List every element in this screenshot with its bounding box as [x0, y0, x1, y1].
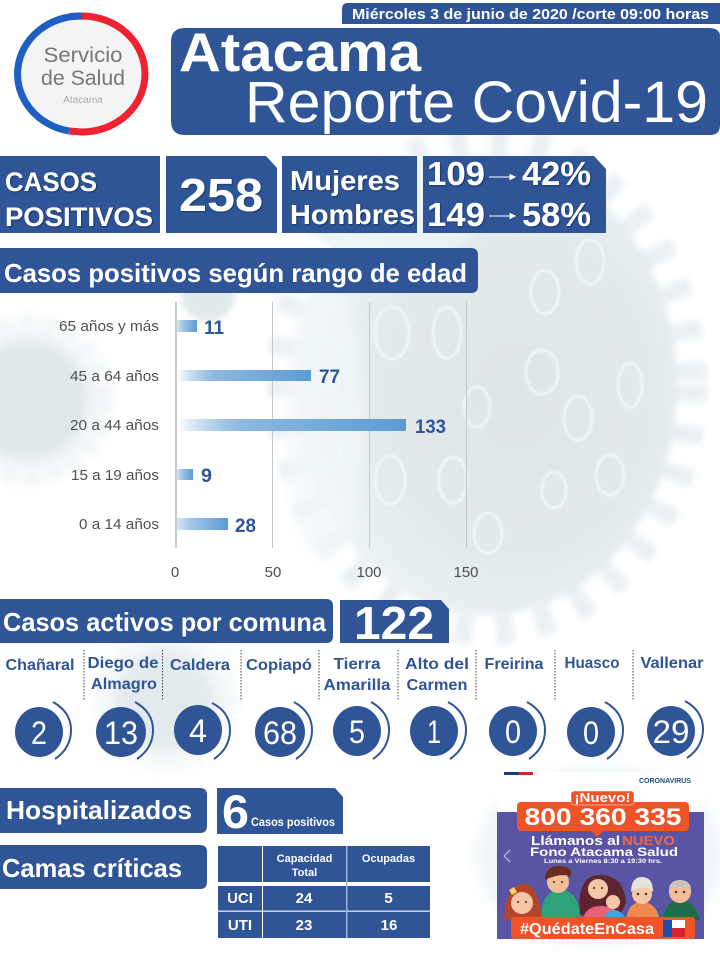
comuna names: Tierra	[334, 656, 381, 673]
comuna names: Caldera	[170, 657, 230, 674]
poster: phone line 800 360 335: CORONAVIRUS	[639, 778, 691, 785]
panel: mujeres hombres: Hombres	[290, 199, 415, 230]
bar chart: age ranges: 28	[235, 516, 256, 537]
count: Copiapó: 68	[263, 715, 297, 751]
count: Diego de Almagro	[96, 702, 153, 759]
table: critical beds: 23	[296, 917, 312, 934]
heading: casos activos por comuna: Casos activos por comuna	[3, 607, 327, 637]
bar chart: age ranges: 15 a 19 años	[71, 467, 159, 484]
poster: phone line 800 360 335: #QuédateEnCasa	[520, 921, 654, 938]
panel: gender counts and percentages	[423, 155, 606, 233]
bar chart: age ranges: 20 a 44 años	[70, 417, 159, 434]
count: Huasco: 0	[583, 715, 599, 751]
heading: camas críticas: Camas críticas	[2, 853, 182, 883]
count: Freirina	[489, 702, 545, 759]
background: small virus left	[0, 324, 104, 476]
comuna names: Alto del	[405, 656, 469, 673]
comuna names: Huasco	[564, 655, 620, 672]
poster: phone line 800 360 335: Llámanos al	[531, 833, 620, 848]
comuna names	[6, 655, 704, 694]
poster: phone line 800 360 335: 800 360 335	[524, 804, 682, 831]
panel: 6 casos positivos	[217, 785, 343, 838]
bar chart: age ranges: 0	[171, 564, 179, 581]
bar chart: age ranges: 133	[415, 417, 446, 438]
poster: phone line 800 360 335: Lunes a Viernes 8:30 a 19:30 hrs.	[544, 859, 662, 865]
comuna names: Vallenar	[640, 655, 704, 672]
count: Tierra Amarilla	[333, 702, 389, 759]
comuna names: Freirina	[484, 656, 544, 673]
count: Huasco	[567, 702, 623, 759]
logo: Servicio de Salud: de Salud	[41, 67, 125, 90]
logo: Servicio de Salud: Servicio	[44, 44, 122, 67]
count: Caldera: 4	[189, 713, 207, 749]
poster: phone line 800 360 335: ¡Nuevo!	[574, 790, 630, 805]
count: Chañaral	[15, 702, 71, 759]
heading: casos positivos según rango de edad	[0, 248, 478, 293]
panel: gender counts and percentages: 149	[427, 196, 485, 233]
title panel: Atacama	[179, 21, 421, 83]
table: critical beds: UCI	[227, 890, 253, 907]
date banner	[342, 3, 720, 24]
count: Alto del Carmen: 1	[427, 714, 441, 750]
poster: phone line 800 360 335	[497, 772, 704, 939]
panel: mujeres hombres	[282, 156, 417, 233]
panel: 6 casos positivos: Casos positivos	[251, 817, 335, 829]
table: critical beds	[218, 846, 430, 938]
count: Tierra Amarilla: 5	[349, 714, 365, 750]
comuna names: Copiapó	[246, 657, 312, 674]
title panel	[171, 21, 720, 135]
bar chart: age ranges: 9	[201, 466, 212, 487]
count: Vallenar	[647, 701, 703, 758]
bar chart: age ranges: 65 años y más	[59, 318, 159, 335]
panel: casos positivos: POSITIVOS	[5, 202, 153, 232]
bar chart: age ranges: 77	[319, 367, 340, 388]
title panel: Reporte Covid-19	[245, 70, 708, 135]
logo: Servicio de Salud: Atacama	[63, 95, 103, 106]
panel: total 258	[166, 156, 277, 233]
bar chart: age ranges	[59, 302, 479, 581]
table: critical beds: 16	[381, 917, 397, 934]
panel: 6 casos positivos: 6	[222, 785, 249, 838]
comuna counts	[15, 701, 703, 759]
panel: casos positivos	[0, 156, 160, 233]
table: critical beds: UTI	[228, 917, 252, 934]
comuna names: Diego de	[88, 655, 159, 672]
panel: mujeres hombres: Mujeres	[290, 165, 400, 196]
date banner: Miércoles 3 de junio de 2020 /corte 09:00 horas	[352, 7, 709, 23]
icon: family	[504, 866, 700, 920]
bar chart: age ranges: 150	[453, 564, 479, 581]
logo: Servicio de Salud	[18, 16, 145, 132]
comuna names: Carmen	[406, 677, 468, 694]
heading: hospitalizados	[0, 788, 207, 833]
panel: gender counts and percentages: 42%	[522, 155, 591, 192]
bar chart: age ranges: 50	[265, 564, 281, 581]
comuna names: Amarilla	[324, 677, 391, 694]
panel: total 258: 258	[179, 169, 263, 221]
heading: casos activos por comuna	[0, 599, 333, 643]
dotted comuna separators	[84, 650, 633, 700]
background: small virus top of chart	[181, 268, 235, 322]
count: Chañaral: 2	[31, 715, 47, 751]
count: Copiapó	[255, 702, 312, 759]
count: Freirina: 0	[505, 714, 521, 750]
table: critical beds: Ocupadas	[362, 853, 415, 865]
panel: casos positivos: CASOS	[5, 167, 97, 197]
count: Caldera	[174, 703, 230, 759]
bar chart: age ranges: 45 a 64 años	[70, 368, 159, 385]
bar chart: age ranges: 100	[356, 564, 382, 581]
count: Alto del Carmen	[410, 702, 466, 759]
background: large virus illustration	[282, 140, 692, 630]
poster: phone line 800 360 335: NUEVO	[622, 833, 675, 848]
panel: gender counts and percentages: 109	[427, 155, 485, 192]
table: critical beds: 24	[296, 890, 313, 907]
heading: casos positivos según rango de edad: Casos positivos según rango de edad	[4, 258, 467, 288]
bar chart: age ranges: 0 a 14 años	[79, 516, 159, 533]
table: critical beds: Total	[292, 867, 317, 879]
table: critical beds: 5	[384, 890, 393, 907]
comuna names: Almagro	[91, 676, 157, 693]
count: Vallenar: 29	[652, 714, 690, 750]
heading: camas críticas	[0, 845, 207, 889]
panel: total activos 122: 122	[354, 597, 434, 649]
heading: hospitalizados: Hospitalizados	[6, 795, 192, 825]
poster: phone line 800 360 335: Fono Atacama Salud	[530, 845, 678, 859]
count: Diego de Almagro: 13	[104, 715, 138, 751]
background: faint virus behind poster	[475, 765, 720, 945]
comuna names: Chañaral	[6, 657, 74, 674]
panel: gender counts and percentages: 58%	[522, 196, 591, 233]
table: critical beds: Capacidad	[277, 853, 332, 865]
background: small virus lower	[101, 636, 229, 764]
bar chart: age ranges: 11	[204, 318, 224, 339]
